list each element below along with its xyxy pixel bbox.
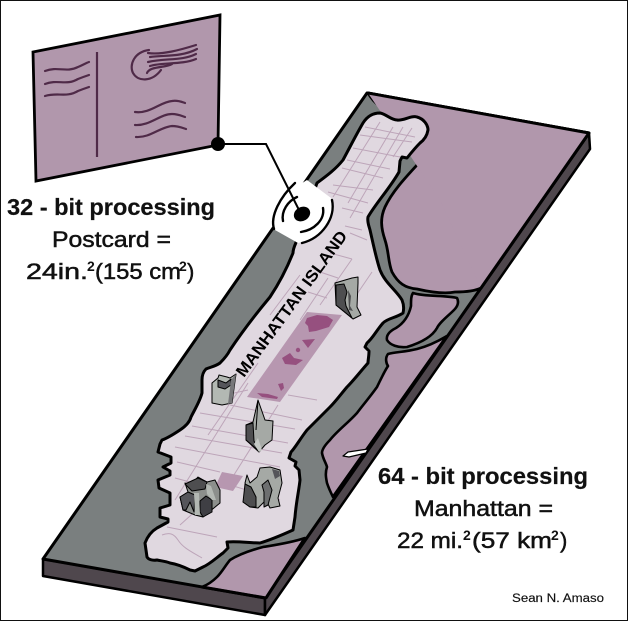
caption: 64-bit: 64 - bit processing <box>378 463 588 489</box>
land: New Jersey side north-east <box>368 93 589 293</box>
land: east river shore <box>322 336 447 497</box>
caption: 32-bit: ) <box>187 259 194 284</box>
caption: 64-bit: Manhattan = <box>414 496 553 521</box>
caption: 32-bit: 32 - bit processing <box>7 194 215 220</box>
postmark <box>132 45 197 79</box>
caption: 64-bit: ) <box>560 528 567 553</box>
slab side faces <box>43 133 590 615</box>
building: uptown <box>335 277 361 319</box>
map label: MANHATTAN ISLAND <box>233 228 351 380</box>
credit: Sean N. Amaso <box>512 593 604 605</box>
map slab <box>43 93 590 615</box>
building: financial cluster <box>180 477 220 517</box>
land: small island <box>387 293 458 347</box>
caption: 64-bit: 2 <box>551 527 559 543</box>
lens arcs <box>273 183 333 243</box>
building: midtown cluster <box>243 467 282 508</box>
caption: 64-bit: 22 mi. <box>397 528 463 553</box>
caption: 32-bit: 2 <box>179 258 187 274</box>
caption: 32-bit <box>7 194 215 284</box>
street grid <box>162 122 415 558</box>
caption: 32-bit: 24in. <box>26 259 88 284</box>
postcard message lines <box>45 62 89 96</box>
caption: 64-bit <box>378 463 588 553</box>
caption: 64-bit: 2 <box>463 527 471 543</box>
reservoirs and lakes <box>257 315 333 399</box>
caption: 32-bit: 2 <box>87 258 95 274</box>
small park <box>215 472 243 491</box>
postcard <box>33 15 220 181</box>
postcard divider <box>96 52 98 157</box>
Manhattan island <box>145 113 428 571</box>
Central Park <box>247 312 342 402</box>
land: south shore <box>202 538 305 598</box>
building: spire <box>246 400 273 452</box>
connector from postcard to lens <box>211 137 313 224</box>
caption: 32-bit: (155 cm <box>95 259 181 284</box>
stamp address lines <box>135 101 186 137</box>
water <box>43 93 589 598</box>
magnifier lens: white cut-out <box>268 180 332 243</box>
building: castle <box>212 374 236 405</box>
white streak <box>343 449 368 457</box>
caption: 32-bit: Postcard = <box>52 227 171 252</box>
caption: 64-bit: (57 km <box>472 528 552 553</box>
